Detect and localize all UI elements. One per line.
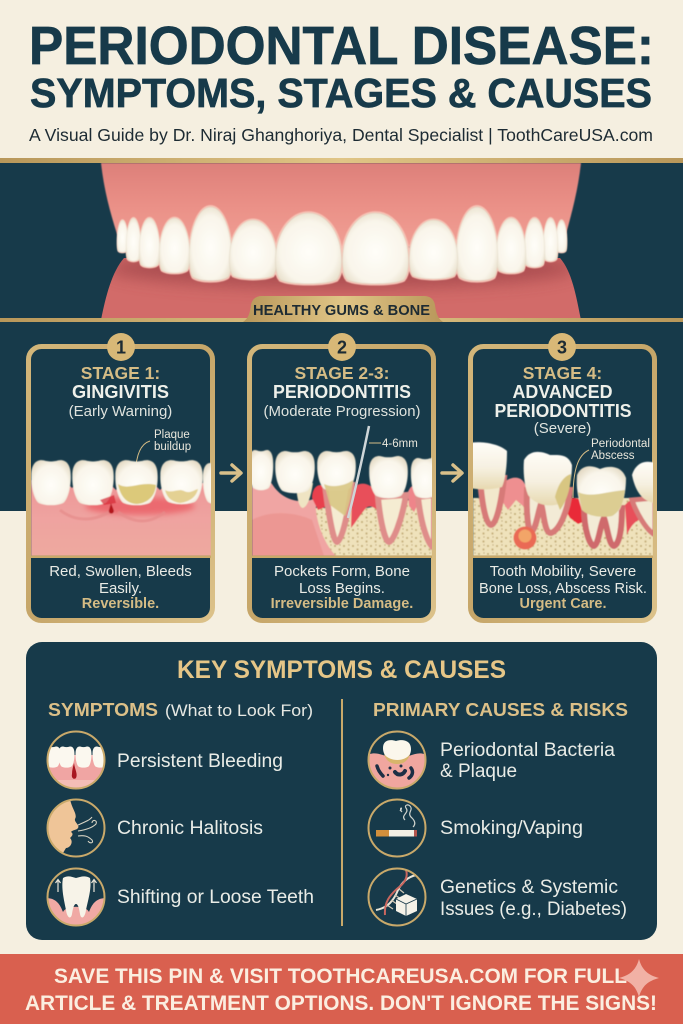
- description: Reversible.: [82, 596, 159, 612]
- label: & Plaque: [440, 761, 517, 782]
- number badge: [328, 333, 356, 361]
- gold rules: [0, 158, 683, 322]
- label: Smoking/Vaping: [440, 818, 583, 839]
- lower gum: [101, 258, 580, 318]
- call to action text: ARTICLE & TREATMENT OPTIONS. DON'T IGNORE THE SIGNS!: [25, 992, 657, 1015]
- label: Shifting or Loose Teeth: [117, 887, 314, 908]
- badge: healthy gums and bone: HEALTHY GUMS & BONE: [253, 303, 430, 319]
- stage heading: [494, 363, 632, 437]
- plaque label: Plaque: [154, 429, 190, 441]
- number badge: 3: [557, 338, 567, 358]
- description: Pockets Form, Bone: [274, 563, 410, 580]
- gum highlights: [117, 207, 567, 284]
- probe and depth label: [348, 426, 418, 518]
- panel background: [26, 642, 657, 940]
- stage heading: PERIODONTITIS: [494, 401, 632, 421]
- stage heading: (Moderate Progression): [264, 403, 420, 420]
- icon: bleeding gums: [46, 730, 106, 790]
- card frame: [28, 346, 212, 620]
- label: [440, 740, 615, 782]
- divider: [473, 556, 653, 558]
- label: Issues (e.g., Diabetes): [440, 899, 627, 920]
- column divider: [341, 699, 343, 926]
- description: Loss Begins.: [299, 580, 385, 597]
- number badge: 1: [116, 338, 126, 358]
- badge: healthy gums and bone: [243, 296, 443, 322]
- icon: sparkle: [619, 959, 659, 997]
- abscess label: [573, 438, 650, 498]
- plaque label: buildup: [154, 441, 191, 453]
- symptoms heading: SYMPTOMS: [48, 700, 158, 720]
- illustration: gingivitis: [31, 460, 231, 556]
- call to action text: SAVE THIS PIN & VISIT TOOTHCAREUSA.COM FOR FULL: [54, 965, 627, 988]
- stage heading: GINGIVITIS: [72, 382, 169, 402]
- description: Bone Loss, Abscess Risk.: [479, 580, 647, 597]
- stage heading: (Early Warning): [69, 403, 172, 420]
- stage heading: [69, 363, 172, 420]
- description: Easily.: [99, 580, 142, 597]
- stage heading: PERIODONTITIS: [273, 382, 411, 402]
- number badge: [107, 333, 135, 361]
- arrow: stage 2 to stage 4: [442, 465, 462, 481]
- divider: [252, 556, 432, 558]
- abscess label: Periodontal: [591, 438, 650, 450]
- label: Genetics & Systemic: [440, 877, 618, 898]
- plaque label: [136, 429, 191, 473]
- footer call to action: [0, 954, 683, 1024]
- divider: [31, 556, 211, 558]
- title: PERIODONTAL DISEASE:: [29, 16, 654, 76]
- stage heading: STAGE 1:: [81, 363, 160, 383]
- label: Chronic Halitosis: [117, 818, 263, 839]
- number badge: 2: [337, 338, 347, 358]
- subtitle: A Visual Guide by Dr. Niraj Ghanghoriya, Dental Specialist | ToothCareUSA.com: [29, 125, 653, 145]
- description: Urgent Care.: [519, 596, 607, 612]
- card frame: [470, 346, 654, 620]
- symptoms heading: (What to Look For): [165, 701, 313, 720]
- illustration: periodontitis: [249, 450, 439, 556]
- stage heading: [264, 363, 420, 420]
- footer band: [0, 954, 683, 1024]
- card frame: [250, 346, 434, 620]
- label: Persistent Bleeding: [117, 751, 283, 772]
- panel: stage 1: [28, 333, 231, 620]
- panel: stage 4: [469, 333, 655, 620]
- icon: dna and sugar cube: [368, 868, 426, 926]
- description: Red, Swollen, Bleeds: [49, 563, 192, 580]
- illustration: advanced periodontitis: [469, 442, 655, 556]
- arrow: stage 1 to stage 2: [221, 465, 241, 481]
- stage heading: STAGE 2-3:: [295, 363, 389, 383]
- teeth: [117, 207, 567, 284]
- description: Tooth Mobility, Severe: [490, 563, 636, 580]
- panel: key symptoms and causes: [26, 642, 657, 940]
- description: [271, 563, 413, 612]
- label: Periodontal Bacteria: [440, 740, 615, 761]
- header: [29, 16, 654, 145]
- causes heading: PRIMARY CAUSES & RISKS: [373, 700, 628, 720]
- label: [440, 877, 627, 920]
- description: [479, 563, 647, 612]
- icon: cigarette: [368, 800, 426, 856]
- heading: KEY SYMPTOMS & CAUSES: [177, 656, 506, 684]
- stage heading: STAGE 4:: [523, 363, 602, 383]
- panel: stage 2-3: [249, 333, 439, 620]
- title: [29, 16, 654, 116]
- icon: bad breath: [46, 798, 106, 858]
- icon: bacteria and plaque: [367, 730, 427, 790]
- probe and depth label: 4-6mm: [382, 438, 418, 450]
- number badge: [548, 333, 576, 361]
- stage heading: ADVANCED: [512, 382, 612, 402]
- symptoms heading: [48, 700, 313, 720]
- icon: loose tooth: [46, 868, 106, 928]
- stage heading: (Severe): [534, 420, 591, 437]
- call to action text: [25, 965, 657, 1015]
- navy band: [0, 160, 683, 511]
- description: Irreversible Damage.: [271, 596, 413, 612]
- hero illustration: healthy gums and teeth: [95, 163, 590, 325]
- title: SYMPTOMS, STAGES & CAUSES: [30, 70, 652, 116]
- abscess label: Abscess: [591, 450, 635, 462]
- description: [49, 563, 192, 612]
- upper gum: [101, 163, 581, 248]
